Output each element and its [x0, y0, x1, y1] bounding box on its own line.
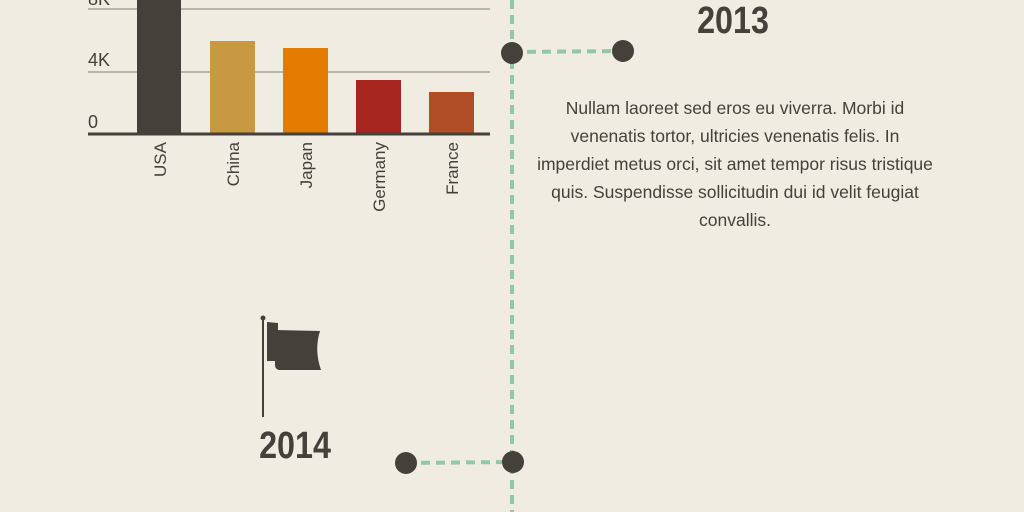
- timeline line: [510, 0, 514, 512]
- text block 2013: convallis.: [699, 210, 771, 230]
- heading 2014: 2014: [259, 425, 331, 467]
- bar chart: France: [443, 142, 462, 195]
- text block 2013: [537, 98, 933, 230]
- bar chart: 4K: [88, 50, 110, 70]
- connector 2014: [395, 451, 524, 474]
- text block 2013: imperdiet metus orci, sit amet tempor risus tristique: [537, 154, 933, 174]
- bar chart: China: [224, 141, 243, 186]
- bar chart: [88, 0, 490, 212]
- bar chart: 0: [88, 112, 98, 132]
- text block 2013: Nullam laoreet sed eros eu viverra. Morbi id: [566, 98, 904, 118]
- connector 2013: [501, 40, 634, 64]
- bar chart: USA: [151, 141, 170, 177]
- heading 2013: 2013: [697, 0, 769, 42]
- icon: flag: [260, 316, 321, 417]
- text block 2013: quis. Suspendisse sollicitudin dui id velit feugiat: [551, 182, 919, 202]
- text block 2013: venenatis tortor, ultricies venenatis felis. In: [571, 126, 899, 146]
- bar chart: Germany: [370, 142, 389, 212]
- bar chart: Japan: [297, 142, 316, 188]
